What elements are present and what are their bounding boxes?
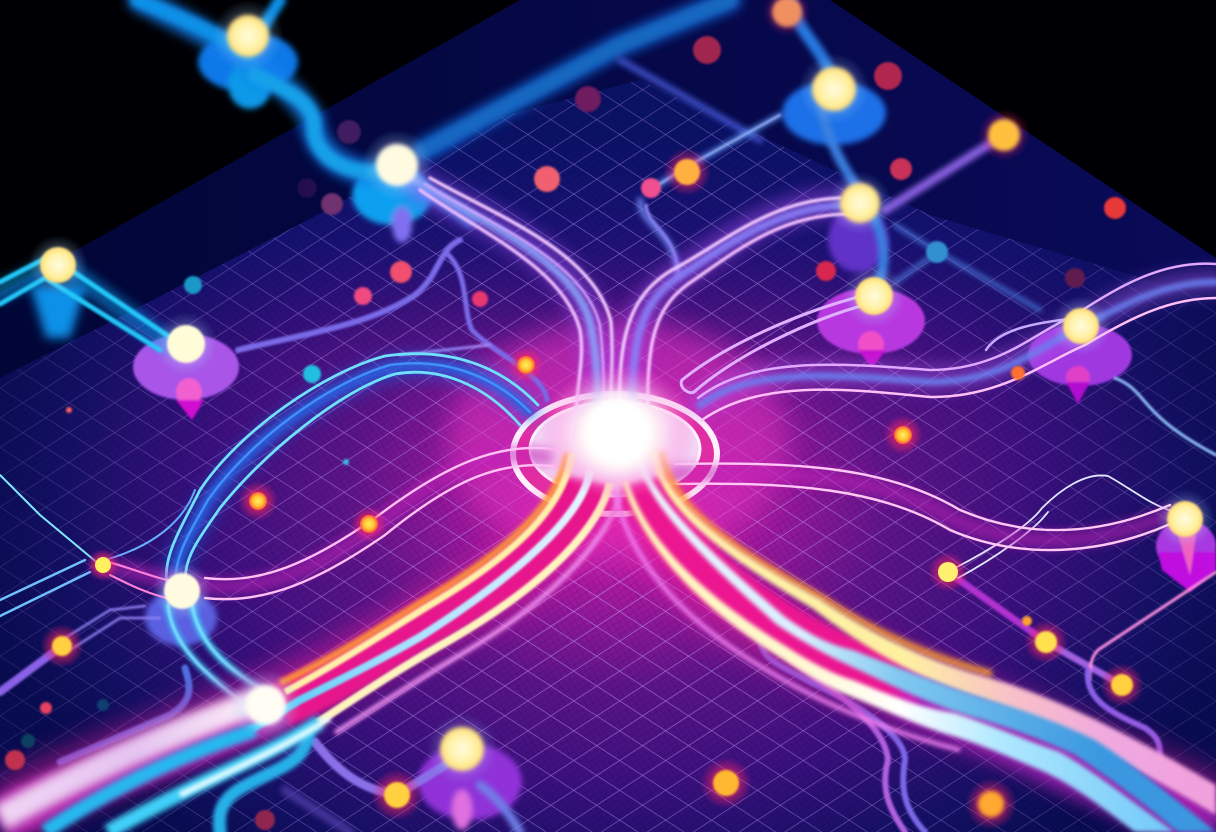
bundle: right to hub [681, 264, 1216, 420]
bundle: blue arc from hub to lower left node [166, 354, 538, 832]
bundle: hub to right lower traces [675, 464, 1170, 550]
bundle: cyan pair at upper left [0, 256, 170, 350]
bundle: main lower right [614, 450, 1216, 832]
bundle: top left to hub [405, 178, 612, 440]
bundle: hub to lower left pink traces [100, 448, 560, 600]
central hub rings [513, 394, 717, 514]
bundle: main lower left [0, 453, 622, 832]
bundle: top right to hub [620, 198, 850, 440]
central hub glow [540, 364, 696, 500]
